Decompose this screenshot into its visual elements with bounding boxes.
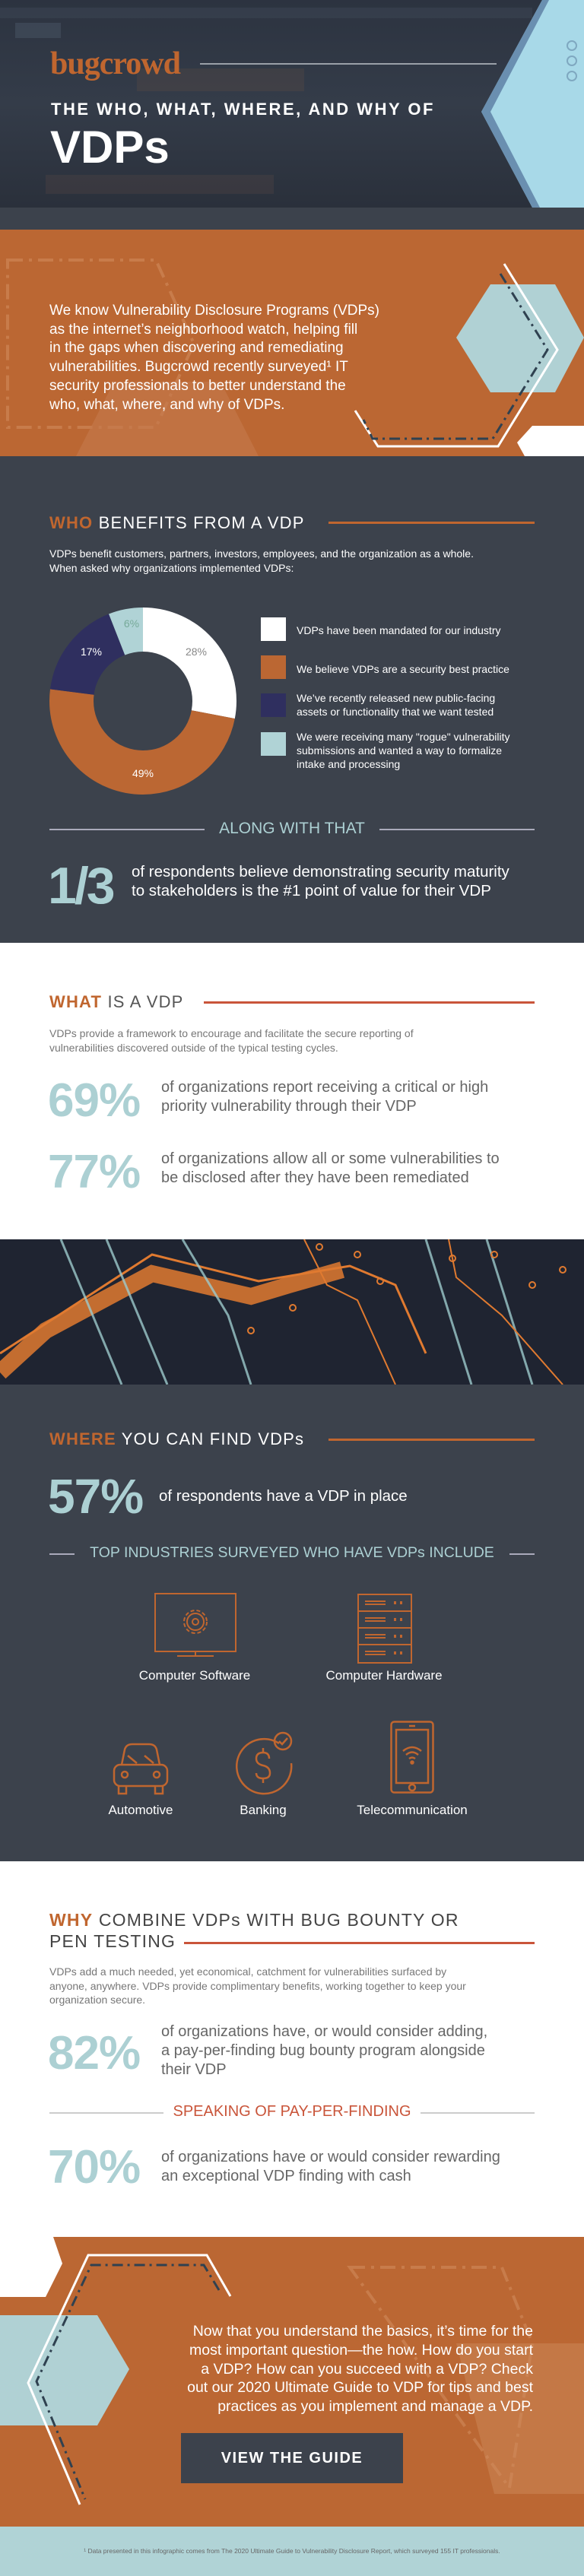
panel: what is a vdp (0, 943, 584, 1239)
legend: VDPs have been mandated for our industry (297, 624, 500, 636)
donut chart: 6% (124, 617, 139, 630)
heading: why: PEN TESTING (49, 1931, 176, 1951)
panel: why combine: their VDP (161, 2061, 227, 2078)
panel: why combine: of organizations have, or would consider adding, (161, 2023, 487, 2040)
legend: We believe VDPs are a security best practice (297, 663, 509, 675)
intro text: security professionals to better understand the (49, 378, 346, 394)
panel: why combine (0, 1861, 584, 2237)
stat 82: 82% (48, 2027, 140, 2080)
label: Telecommunication (357, 1803, 468, 1817)
text: anyone, anywhere. VDPs provide complimentary benefits, working together to keep your (49, 1980, 466, 1992)
legend: assets or functionality that we want tested (297, 706, 494, 718)
stat 70: 70% (48, 2141, 140, 2194)
heading: where: WHERE YOU CAN FIND VDPs (49, 1429, 304, 1448)
panel: who benefits: of respondents believe demonstrating security maturity (132, 863, 509, 880)
stat 69: 69% (48, 1074, 140, 1127)
text: VDPs provide a framework to encourage and facilitate the secure reporting of (49, 1027, 414, 1039)
button: VIEW THE GUIDE (221, 2450, 363, 2467)
footer note (0, 2527, 584, 2576)
heading: what: WHAT IS A VDP (49, 992, 184, 1011)
intro text: in the gaps when discovering and remediating (49, 340, 344, 356)
cta text: a VDP? How can you succeed with a VDP? Check (201, 2361, 533, 2378)
label: Automotive (108, 1803, 173, 1817)
divider: along with that: ALONG WITH THAT (219, 820, 365, 837)
title: VDPs: VDPs (50, 122, 170, 173)
stat 57: 57% (48, 1469, 143, 1524)
text: VDPs add a much needed, yet economical, catchment for vulnerabilities surfaced by (49, 1965, 446, 1978)
heading: who: WHO BENEFITS FROM A VDP (49, 513, 305, 532)
text: who intro: When asked why organizations implemented VDPs: (49, 562, 294, 574)
icon: phone (390, 1721, 434, 1794)
donut chart: 49% (132, 767, 154, 779)
cta text: most important question—the how. How do you start (189, 2342, 533, 2359)
text (49, 1965, 466, 2006)
intro text (49, 303, 379, 413)
logo: bugcrowd (50, 46, 180, 81)
intro text: vulnerabilities. Bugcrowd recently surveyed¹ IT (49, 359, 348, 375)
icon: computer software (154, 1593, 236, 1657)
text: organization secure. (49, 1994, 145, 2006)
label: Computer Software (139, 1668, 250, 1683)
text: who intro: VDPs benefit customers, partners, investors, employees, and the organization as a whole. (49, 547, 474, 560)
text (49, 1027, 414, 1054)
divider: speaking of: SPEAKING OF PAY-PER-FINDING (173, 2103, 411, 2120)
panel: what is a vdp: priority vulnerability through their VDP (161, 1098, 417, 1115)
donut chart (49, 608, 236, 795)
intro text: as the internet’s neighborhood watch, helping fill (49, 322, 357, 338)
panel: why combine: a pay-per-finding bug bounty program alongside (161, 2042, 485, 2059)
legend: intake and processing (297, 758, 400, 770)
text: vulnerabilities discovered outside of the typical testing cycles. (49, 1042, 338, 1054)
donut chart: 17% (81, 646, 102, 658)
legend: We’ve recently released new public-facing (297, 692, 495, 704)
cta text (187, 2323, 533, 2415)
panel: why combine: of organizations have or would consider rewarding (161, 2149, 500, 2165)
cta text: practices as you implement and manage a VDP. (217, 2398, 533, 2415)
panel: what is a vdp: be disclosed after they have been remediated (161, 1169, 469, 1186)
icon: car (113, 1743, 169, 1794)
stat 1/3: 1/3 (48, 857, 113, 915)
label: Banking (240, 1803, 287, 1817)
cta text: out our 2020 Ultimate Guide to VDP for tips and best (187, 2379, 533, 2396)
image: circuit board (0, 1239, 584, 1385)
panel: where: of respondents have a VDP in place (159, 1487, 408, 1505)
cta text: Now that you understand the basics, it’s time for the (193, 2323, 533, 2340)
intro text: who, what, where, and why of VDPs. (49, 397, 284, 413)
legend: submissions and wanted a way to formalize (297, 744, 502, 757)
heading: why: WHY COMBINE VDPs WITH BUG BOUNTY OR (49, 1910, 459, 1930)
panel: intro (0, 230, 584, 456)
panel: who benefits: to stakeholders is the #1 point of value for their VDP (132, 882, 491, 899)
panel: what is a vdp: of organizations report receiving a critical or high (161, 1079, 488, 1096)
stat 77: 77% (48, 1146, 140, 1198)
header banner (0, 0, 584, 208)
divider: top industries: TOP INDUSTRIES SURVEYED WHO HAVE VDPs INCLUDE (90, 1544, 494, 1561)
legend (261, 617, 509, 770)
heading: why (49, 1910, 459, 1951)
button (181, 2433, 403, 2483)
title: THE WHO, WHAT, WHERE, AND WHY OF (51, 100, 435, 119)
donut chart: 28% (186, 646, 207, 658)
text: who intro (49, 547, 474, 574)
panel: where (0, 1385, 584, 1861)
panel: why combine: an exceptional VDP finding with cash (161, 2168, 411, 2184)
panel: call to action (0, 2237, 584, 2527)
legend: We were receiving many "rogue" vulnerability (297, 731, 509, 743)
panel: who benefits (0, 456, 584, 943)
icon: banking (236, 1732, 292, 1794)
panel: what is a vdp: of organizations allow all or some vulnerabilities to (161, 1150, 500, 1167)
footer note: ¹ Data presented in this infographic comes from The 2020 Ultimate Guide to Vulnerability Disclosure Report, which surveyed 155 IT professionals. (84, 2547, 500, 2555)
label: Computer Hardware (325, 1668, 443, 1683)
intro text: We know Vulnerability Disclosure Programs (VDPs) (49, 303, 379, 319)
icon: computer hardware (357, 1594, 412, 1664)
